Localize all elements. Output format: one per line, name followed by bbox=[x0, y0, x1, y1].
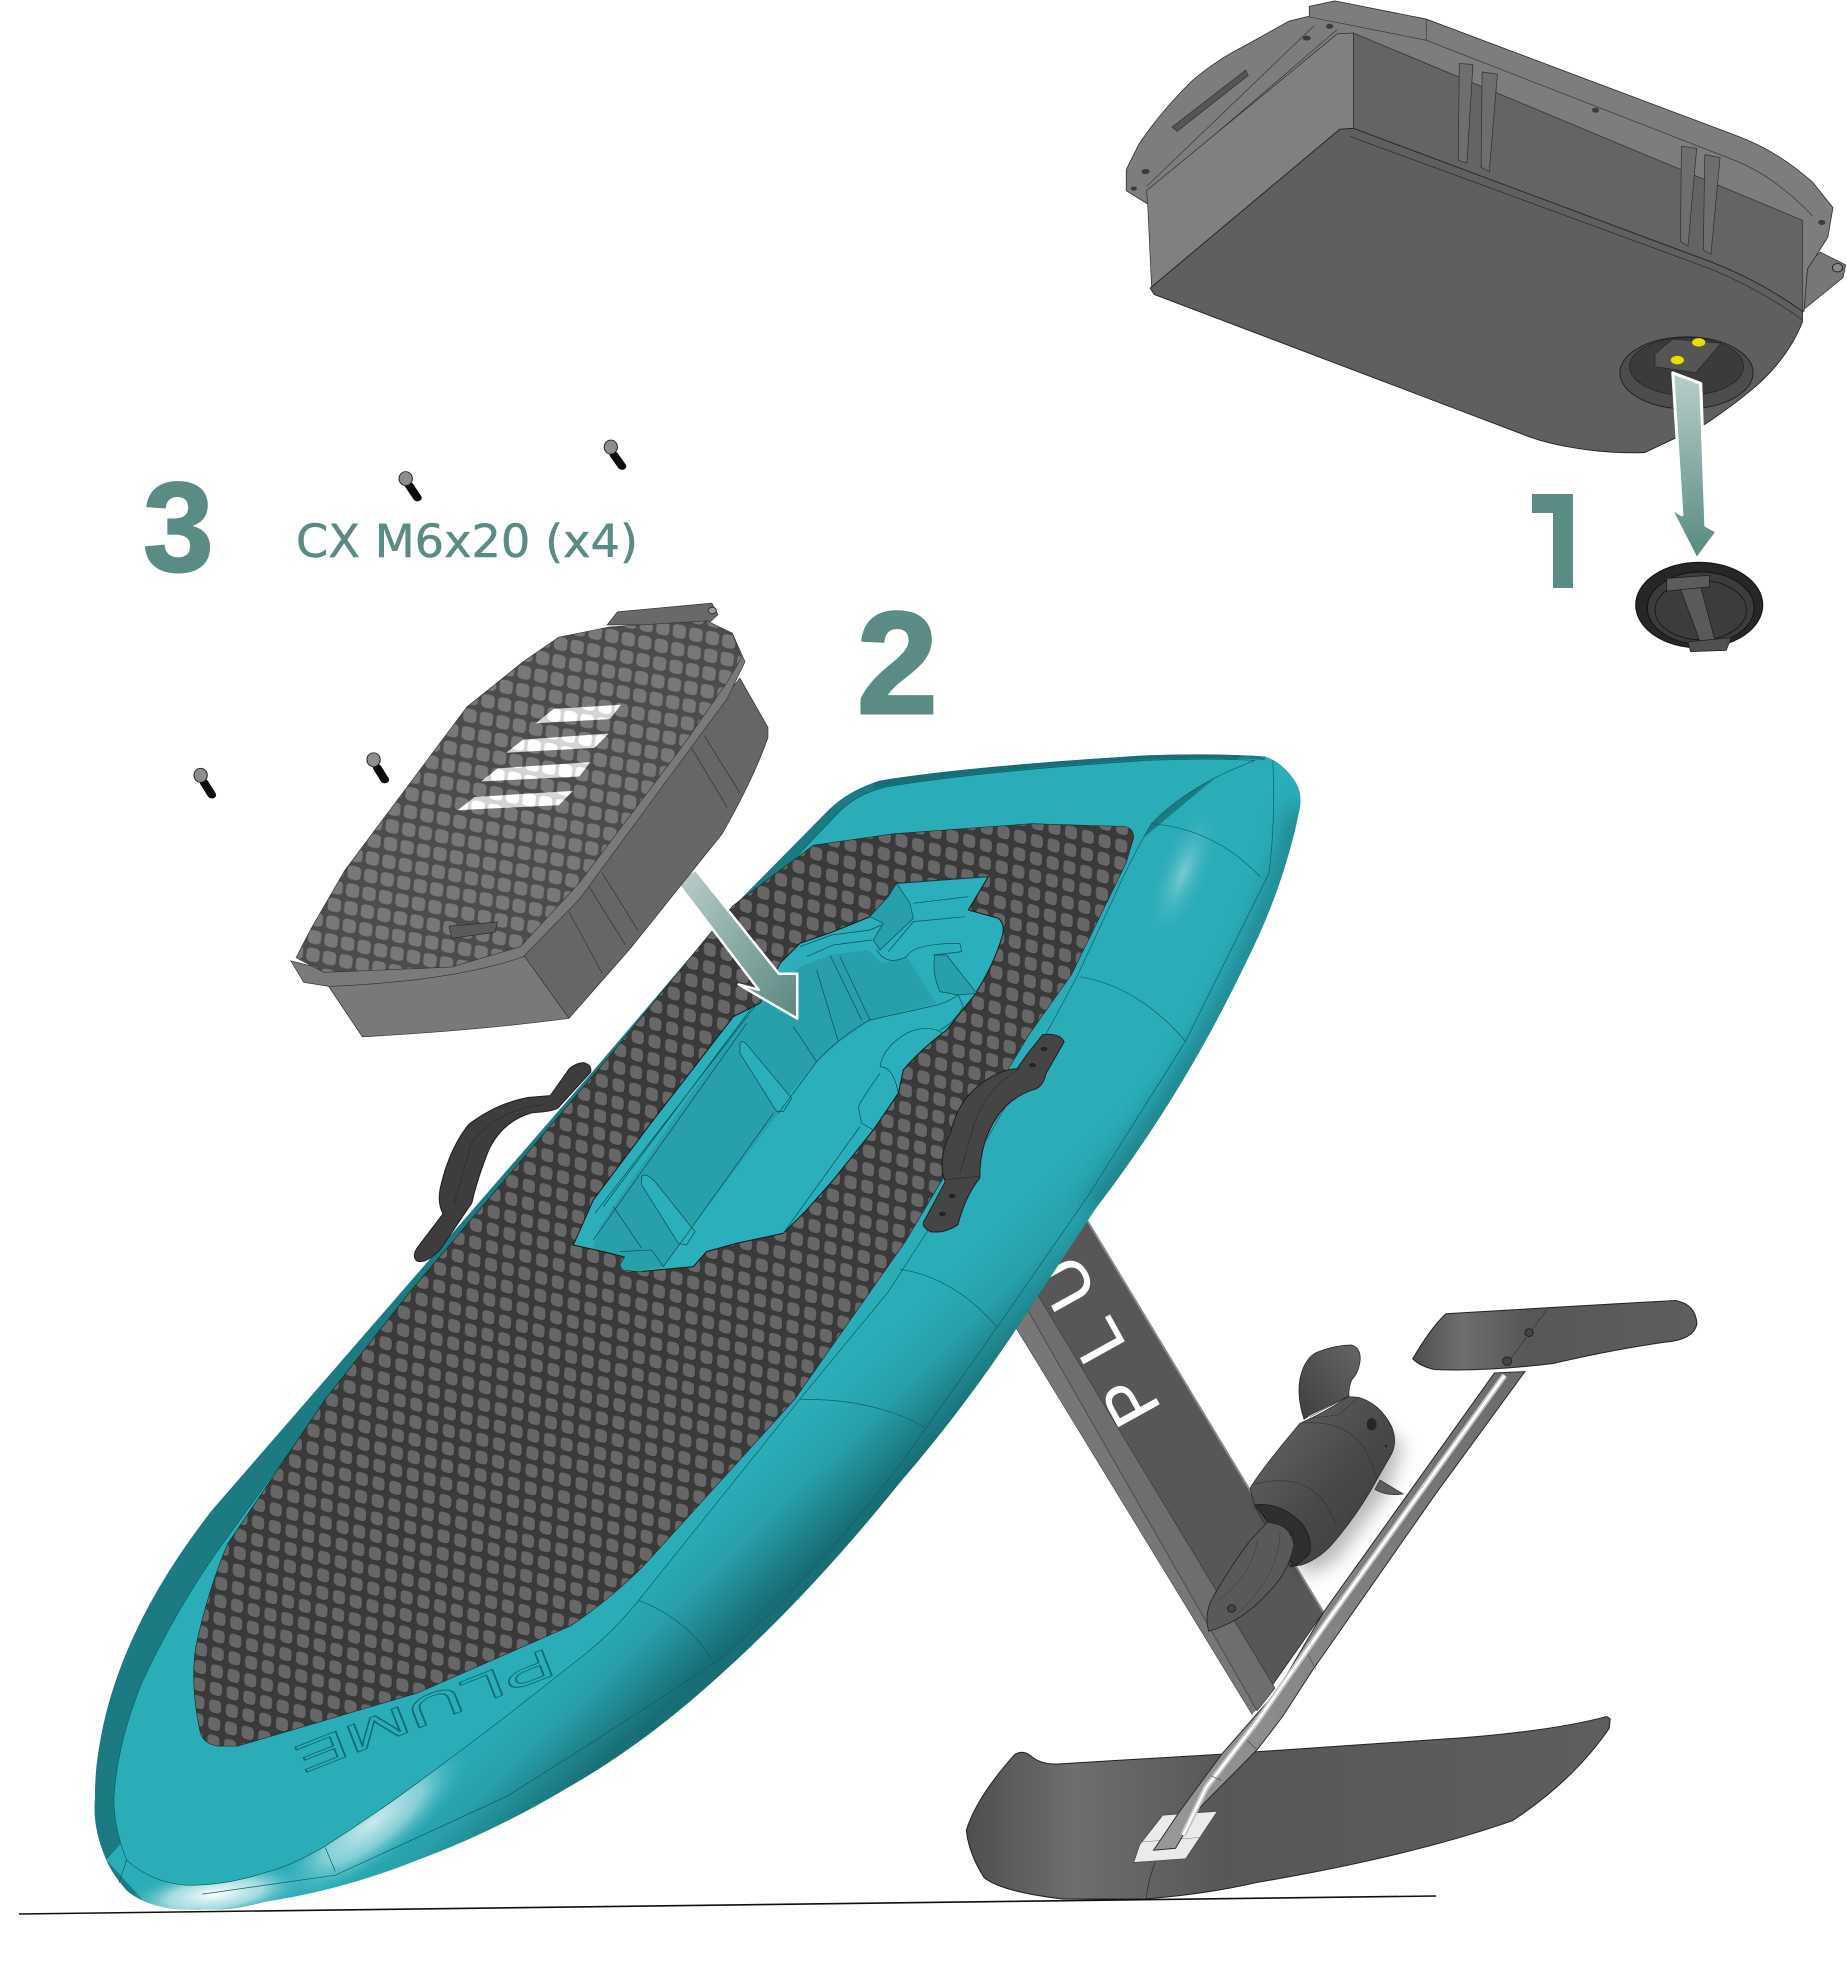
connector cap bbox=[1636, 562, 1763, 652]
board bbox=[95, 747, 1316, 1935]
arrow: battery into recess bbox=[676, 870, 797, 1019]
motor collar bbox=[1255, 1505, 1310, 1567]
screw: lower left bbox=[194, 768, 212, 795]
step number 1: 1 bbox=[1516, 469, 1589, 616]
rear stabilizer bbox=[1413, 1300, 1697, 1370]
foil mast bbox=[1015, 1219, 1323, 1714]
recess floor bbox=[593, 950, 937, 1272]
lid logo stripes bbox=[458, 705, 621, 810]
wing centre seam bbox=[1146, 1863, 1155, 1899]
arrow: cap removal bbox=[1670, 373, 1717, 559]
fuselage bbox=[1154, 1372, 1525, 1850]
motor soft shadow bbox=[1260, 1410, 1403, 1577]
board outer silhouette bbox=[95, 754, 1300, 1910]
battery underside bbox=[1150, 128, 1802, 453]
battery back wall bbox=[1354, 33, 1802, 316]
lid front wall bbox=[327, 951, 569, 1037]
lid side wall bbox=[521, 678, 768, 1018]
connector well bbox=[1620, 337, 1753, 409]
battery left wall bbox=[1147, 33, 1354, 288]
motor body bbox=[1250, 1397, 1395, 1567]
lid rim bbox=[291, 633, 745, 986]
recess rib upper bbox=[740, 1042, 792, 1112]
screw: top middle bbox=[399, 472, 417, 498]
screw: lower middle bbox=[367, 753, 385, 780]
lid side ribs bbox=[569, 736, 740, 973]
recess contour lines bbox=[593, 877, 988, 1267]
board top face bbox=[114, 759, 1255, 1885]
lid mounting tab bbox=[607, 603, 718, 625]
step number 2: 2 bbox=[857, 582, 938, 744]
battery lower view bbox=[1126, 1, 1846, 453]
mount tab bbox=[1800, 252, 1846, 309]
carry handle: right bbox=[923, 1034, 1064, 1232]
wall ribs bbox=[1458, 64, 1720, 254]
step number 1 bbox=[1532, 494, 1573, 588]
battery flange bbox=[1126, 1, 1833, 311]
recess slot bbox=[934, 955, 977, 995]
screw: top right bbox=[604, 440, 622, 466]
yellow connector pin bbox=[1671, 356, 1684, 364]
board seam lines bbox=[119, 760, 1274, 1894]
propulsion motor bbox=[1250, 1345, 1403, 1577]
mast logo text: PLUME bbox=[948, 1113, 1175, 1439]
board rail bbox=[106, 747, 1316, 1935]
motor pod bbox=[1207, 1522, 1294, 1631]
lid traction top bbox=[296, 621, 741, 972]
ground line bbox=[19, 1896, 1436, 1914]
battery lid assembly bbox=[291, 603, 768, 1037]
carry handle: left bbox=[414, 1063, 591, 1262]
recess pocket block bbox=[870, 883, 913, 950]
screw specification label: CX M6x20 (x4) bbox=[296, 515, 638, 568]
wing mount plate bbox=[1134, 1811, 1217, 1863]
recess rib lower bbox=[642, 1175, 695, 1245]
flange holes bbox=[1131, 24, 1825, 225]
yellow connector pin bbox=[1692, 338, 1705, 347]
step number 3: 3 bbox=[143, 456, 214, 598]
battery recess bbox=[573, 877, 1003, 1272]
deck traction pad bbox=[194, 824, 1134, 1746]
board engraved logo: PLUME bbox=[289, 1639, 561, 1781]
flange slot bbox=[1172, 70, 1248, 131]
inner flange lip bbox=[1147, 17, 1813, 216]
lid latch bbox=[449, 922, 498, 938]
lower propeller blade bbox=[1375, 1480, 1403, 1495]
front wing bbox=[966, 1717, 1610, 1899]
upper propeller blade bbox=[1299, 1345, 1360, 1419]
